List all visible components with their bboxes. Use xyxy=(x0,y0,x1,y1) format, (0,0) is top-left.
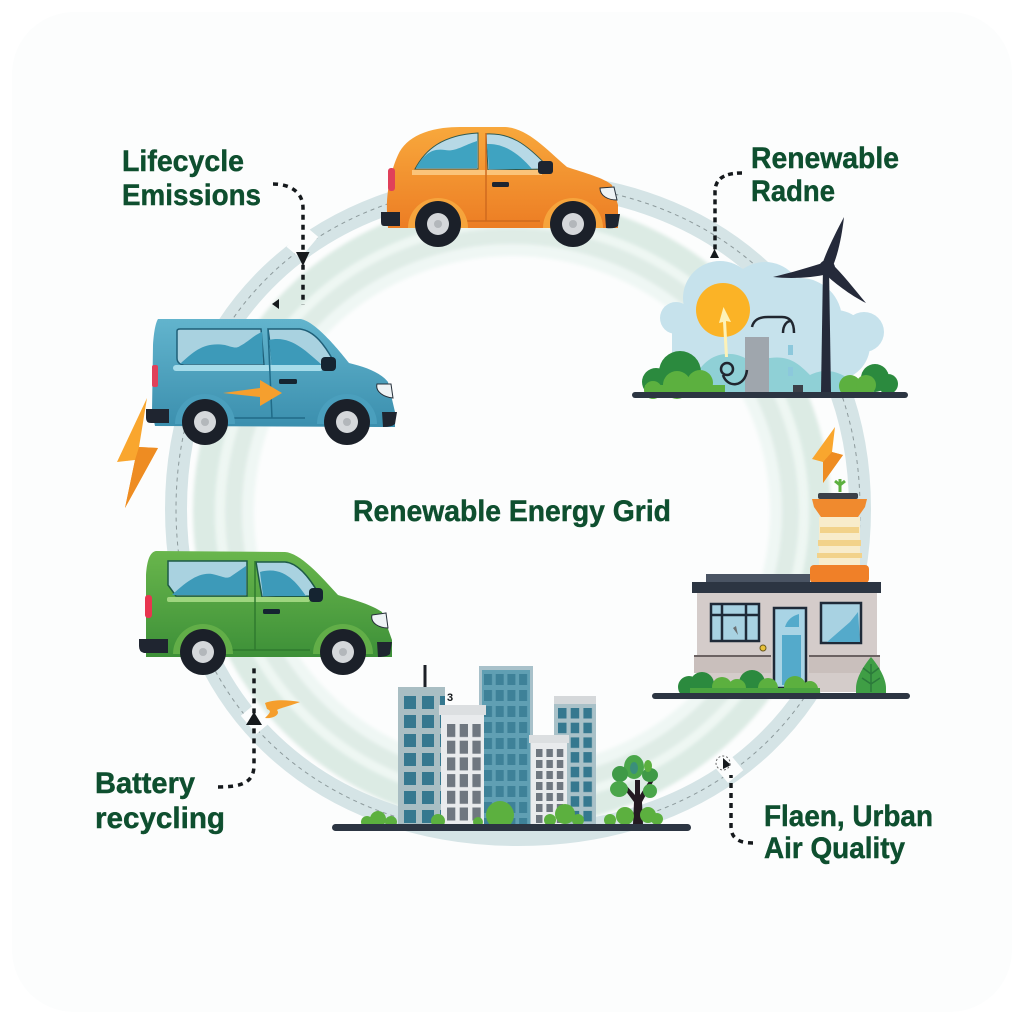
bottom of ring under city xyxy=(424,831,612,843)
number on building: 3 xyxy=(447,692,453,704)
arrow: orange on van door xyxy=(223,380,282,406)
rear window xyxy=(177,329,264,365)
car body xyxy=(387,127,618,228)
dashed circle xyxy=(716,756,730,770)
wall xyxy=(697,593,877,692)
belt line xyxy=(167,597,310,602)
heading: Renewable Energy Grid: Renewable Energy Grid xyxy=(353,495,671,528)
door line xyxy=(232,330,305,418)
gray storage tower xyxy=(745,337,769,392)
blue van xyxy=(146,319,397,445)
door line xyxy=(465,133,540,221)
ring: lifecycle road xyxy=(176,183,860,835)
mirror xyxy=(309,588,323,602)
orange car xyxy=(381,127,620,247)
left shrubs xyxy=(642,351,725,399)
mirror xyxy=(538,161,553,174)
building A xyxy=(398,665,445,824)
dotted connector xyxy=(218,668,254,787)
building C xyxy=(439,705,486,824)
building D xyxy=(554,696,596,824)
tail light xyxy=(388,168,395,191)
wheels xyxy=(182,399,370,445)
callout: Lifecycle Emissions xyxy=(122,145,310,309)
wheel arches xyxy=(408,198,603,228)
headlight xyxy=(600,187,617,200)
green van xyxy=(139,551,392,675)
arrowhead xyxy=(723,758,731,769)
scene: clean city skyline xyxy=(332,665,691,843)
tree xyxy=(610,755,658,824)
ground line xyxy=(332,824,691,831)
tower stripes xyxy=(817,517,862,565)
front window xyxy=(268,329,333,366)
door handle xyxy=(492,182,509,187)
tail light xyxy=(152,365,158,387)
bushes xyxy=(361,801,663,829)
icon: lightning bolt left xyxy=(117,398,158,508)
icon: wind turbine xyxy=(773,217,866,392)
wheels xyxy=(180,629,366,675)
arrowhead xyxy=(710,249,719,258)
callout: Flaen, Urban Air Quality xyxy=(716,756,933,865)
cloud puff over sun xyxy=(733,330,775,345)
label text line 2: recycling xyxy=(95,802,225,835)
door handle xyxy=(279,379,297,384)
ledges xyxy=(694,655,880,673)
right shrubs xyxy=(839,364,898,397)
icon: orange swoosh xyxy=(265,700,300,718)
callout: Battery recycling xyxy=(95,668,300,835)
label text line 2: Radne xyxy=(751,175,835,208)
tower base xyxy=(810,565,869,583)
front window xyxy=(486,134,550,170)
label text: Renewable xyxy=(751,142,899,175)
belt line xyxy=(412,170,542,175)
van body xyxy=(146,551,392,657)
wheels xyxy=(415,201,596,247)
door line xyxy=(232,561,310,650)
headlight xyxy=(377,384,393,398)
leafy bush xyxy=(856,657,886,693)
roof top xyxy=(706,574,810,582)
label text line 2: Emissions xyxy=(122,179,261,212)
rear window xyxy=(415,133,478,169)
water drops xyxy=(788,345,793,376)
left window xyxy=(711,604,759,641)
small device xyxy=(793,385,803,392)
sprout xyxy=(835,479,845,492)
rear window xyxy=(168,561,247,596)
belt line xyxy=(173,365,323,371)
label text: Lifecycle xyxy=(122,145,244,178)
small arrowhead xyxy=(272,299,279,309)
cloud backdrop xyxy=(660,261,884,392)
tower head xyxy=(812,499,867,517)
doorbell xyxy=(760,645,766,651)
shrubs xyxy=(678,670,820,698)
bumpers xyxy=(146,409,397,427)
scene: renewable energy with wind turbine xyxy=(632,217,908,399)
ground line xyxy=(632,392,908,398)
bumpers xyxy=(139,639,392,657)
label text: Flaen, Urban xyxy=(764,800,933,833)
callout: Renewable Radne xyxy=(710,142,899,258)
pipe xyxy=(752,317,794,333)
wheel arches xyxy=(175,394,377,424)
front window xyxy=(256,562,320,597)
arrowhead xyxy=(296,252,310,266)
icon: sun xyxy=(696,283,750,337)
bumpers xyxy=(381,212,620,228)
label text: Battery xyxy=(95,767,195,800)
icon: arrow up xyxy=(719,307,731,357)
dotted connector xyxy=(731,775,753,843)
tower cap xyxy=(818,493,858,499)
headlight xyxy=(372,613,388,628)
dotted connector xyxy=(273,184,303,305)
building E xyxy=(529,735,569,824)
van body xyxy=(152,319,395,427)
roof xyxy=(692,582,881,593)
hose and gauge xyxy=(721,363,747,384)
tail light xyxy=(145,595,152,618)
label text line 2: Air Quality xyxy=(764,832,905,865)
scene: house with charging tower xyxy=(652,427,910,699)
ground line xyxy=(652,693,910,699)
right window xyxy=(821,603,861,643)
door handle xyxy=(263,609,280,614)
dotted connector xyxy=(715,173,742,252)
building B xyxy=(479,666,533,824)
mirror xyxy=(321,357,336,371)
door xyxy=(774,608,806,688)
teal hills xyxy=(690,354,860,392)
wheel arches xyxy=(173,624,373,654)
icon: lightning bolt right xyxy=(812,427,843,483)
arrowhead xyxy=(246,712,262,725)
